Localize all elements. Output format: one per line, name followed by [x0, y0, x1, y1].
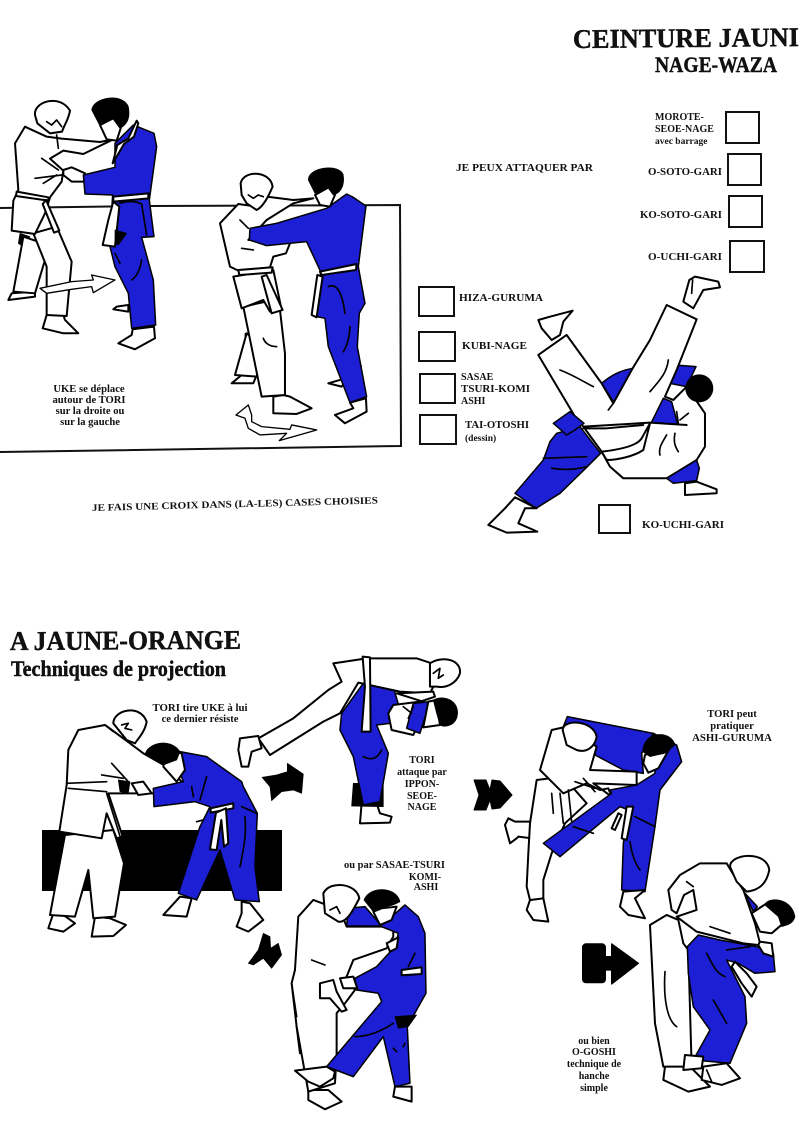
figure: first pair, uke moves around tori: [8, 98, 157, 349]
arrow: to ashi-guruma: [474, 780, 512, 810]
checklist: right column techniques: O-UCHI-GARI: [648, 252, 722, 263]
black mat strip: [42, 830, 282, 891]
caption: tori peut pratiquer ashi-guruma: pratiquer: [710, 721, 754, 732]
subtitle: nage-waza: NAGE-WAZA: [655, 52, 777, 77]
title: a jaune-orange: A JAUNE-ORANGE: [10, 625, 241, 656]
subtitle: techniques de projection: Techniques de projection: [11, 656, 226, 681]
checklist: left column techniques: ASHI: [461, 396, 486, 407]
caption: ou bien o-goshi: ou bien: [578, 1036, 610, 1047]
figure: ippon-seoe-nage: [238, 657, 460, 823]
caption: ou bien o-goshi: hanche: [579, 1071, 610, 1082]
text block: uke se deplace: sur la droite ou: [56, 406, 124, 417]
text block: uke se deplace: UKE se déplace: [53, 384, 125, 395]
checklist: right column techniques: SEOE-NAGE: [655, 124, 714, 135]
mat outline: [0, 205, 401, 452]
arrow: [262, 763, 303, 801]
caption: ou bien o-goshi: O-GOSHI: [572, 1047, 616, 1058]
caption: ou par sasae-tsuri-komi-ashi: KOMI-: [409, 872, 441, 883]
text block: uke se deplace: sur la gauche: [60, 417, 120, 428]
checklist: left column techniques: TAI-OTOSHI: [465, 420, 529, 431]
caption: tori tire uke: ce dernier résiste: [162, 714, 239, 725]
instruction: je peux attaquer par: JE PEUX ATTAQUER PAR: [456, 163, 594, 174]
caption: tori attaque par ippon-seoe-nage: SEOE-: [407, 791, 437, 802]
caption: ou bien o-goshi: [567, 1036, 622, 1094]
caption: tori tire uke: TORI tire UKE à lui: [153, 702, 247, 714]
checklist: right column techniques: avec barrage: [655, 137, 708, 147]
checklist: ko-uchi-gari: KO-UCHI-GARI: [642, 520, 724, 531]
checklist: left column techniques: SASAE: [461, 372, 494, 383]
title: ceinture jaune: CEINTURE JAUNI: [573, 22, 799, 54]
caption: tori attaque par ippon-seoe-nage: attaque par: [397, 767, 447, 778]
text block: uke se deplace: autour de TORI: [52, 395, 126, 406]
caption: ou par sasae-tsuri-komi-ashi: [344, 860, 445, 893]
caption: tori attaque par ippon-seoe-nage: TORI: [409, 755, 435, 766]
checklist: left column techniques: HIZA-GURUMA: [459, 293, 544, 304]
figure: sasae-tsuri-komi-ashi: [248, 885, 426, 1109]
caption: ou par sasae-tsuri-komi-ashi: ASHI: [414, 882, 438, 893]
checklist: right column techniques: O-SOTO-GARI: [648, 167, 722, 178]
caption: tori peut pratiquer ashi-guruma: TORI peut: [707, 709, 757, 720]
checklist: left column techniques: (dessin): [465, 433, 496, 444]
text block: uke se deplace: [52, 384, 126, 428]
arrow: to o-goshi: [582, 943, 638, 984]
checklist: left column techniques: TSURI-KOMI: [461, 384, 530, 395]
checklist: left column techniques: [419, 287, 544, 444]
figure: tori pulls uke: [48, 710, 303, 937]
checklist: ko-uchi-gari: [599, 505, 724, 533]
caption: ou bien o-goshi: technique de: [567, 1059, 622, 1070]
figure: tai-otoshi throw: [488, 277, 720, 533]
caption: tori attaque par ippon-seoe-nage: IPPON-: [405, 779, 439, 790]
caption: tori peut pratiquer ashi-guruma: ASHI-GURUMA: [692, 732, 772, 744]
figure: o-goshi: [650, 856, 795, 1092]
caption: tori tire uke: [153, 702, 247, 725]
checklist: left column techniques: KUBI-NAGE: [462, 341, 527, 352]
caption: tori attaque par ippon-seoe-nage: [397, 755, 447, 813]
caption: tori attaque par ippon-seoe-nage: NAGE: [408, 802, 437, 813]
checklist: right column techniques: MOROTE-: [655, 112, 704, 123]
caption: ou par sasae-tsuri-komi-ashi: ou par SASAE-TSURI: [344, 860, 445, 871]
arrow: [40, 275, 115, 293]
figure: ashi-guruma: [505, 717, 682, 922]
checklist: right column techniques: KO-SOTO-GARI: [640, 210, 722, 221]
figure: second pair on the mat: [220, 168, 367, 441]
caption: ou bien o-goshi: simple: [580, 1083, 608, 1094]
instruction: je fais une croix: JE FAIS UNE CROIX DANS (LA-LES) CASES CHOISIES: [92, 496, 378, 514]
checklist: right column techniques: [640, 112, 764, 272]
caption: tori peut pratiquer ashi-guruma: [692, 709, 772, 744]
arrow: [236, 405, 317, 441]
